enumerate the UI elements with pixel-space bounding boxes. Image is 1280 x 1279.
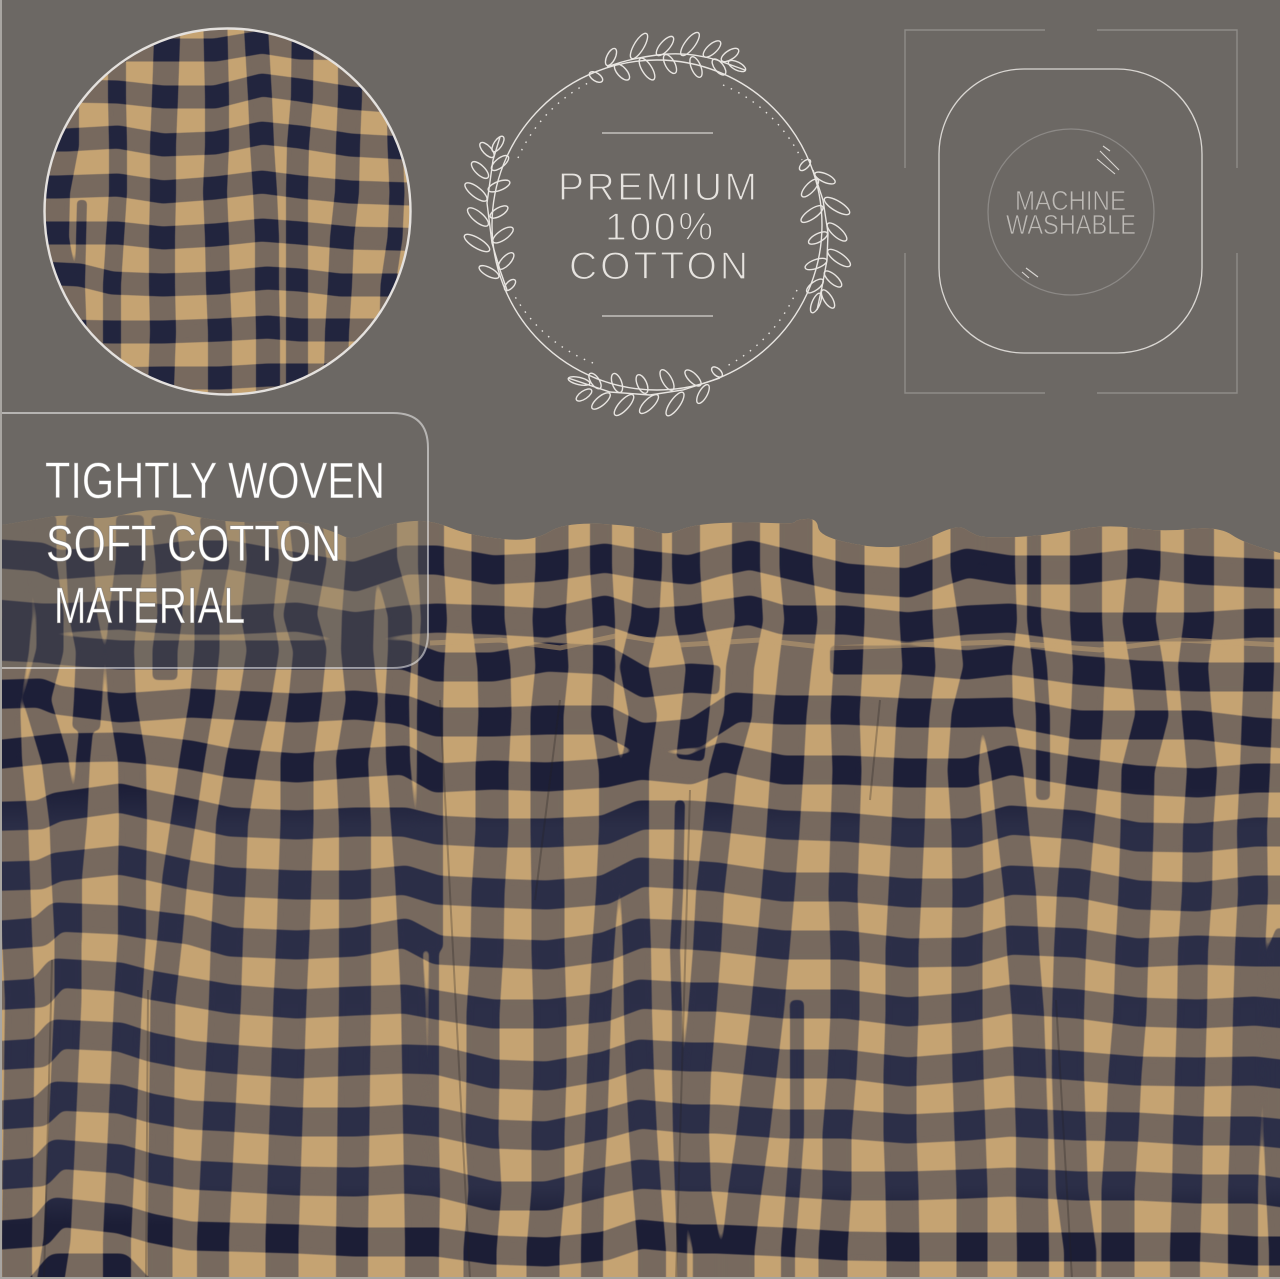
washable text <box>1006 185 1136 240</box>
badge text: PREMIUM <box>558 166 757 209</box>
callout text: TIGHTLY WOVEN <box>45 452 385 509</box>
circular fabric close-up <box>43 27 412 396</box>
bottom branch <box>567 365 724 418</box>
door glints <box>1022 146 1119 278</box>
badge text: COTTON <box>569 245 748 288</box>
washable text: WASHABLE <box>1006 209 1136 240</box>
corner brackets <box>905 30 1237 393</box>
callout text <box>45 452 385 634</box>
panel: tightly woven callout <box>2 413 428 668</box>
badge rules <box>602 133 713 316</box>
badge text: 100% <box>605 206 713 249</box>
callout text: SOFT COTTON <box>46 515 341 572</box>
top branch <box>588 30 747 84</box>
badge: premium cotton wreath <box>462 30 853 418</box>
wreath ring <box>492 60 822 390</box>
main photo: navy and tan check fabric valance <box>0 500 1280 1279</box>
washer door <box>988 129 1154 295</box>
callout text: MATERIAL <box>54 577 245 634</box>
badge text <box>558 166 757 288</box>
left branch <box>462 134 517 292</box>
right branch <box>798 158 853 314</box>
badge: machine washable <box>905 30 1237 393</box>
washer outline <box>939 69 1202 353</box>
washable text: MACHINE <box>1015 185 1126 216</box>
